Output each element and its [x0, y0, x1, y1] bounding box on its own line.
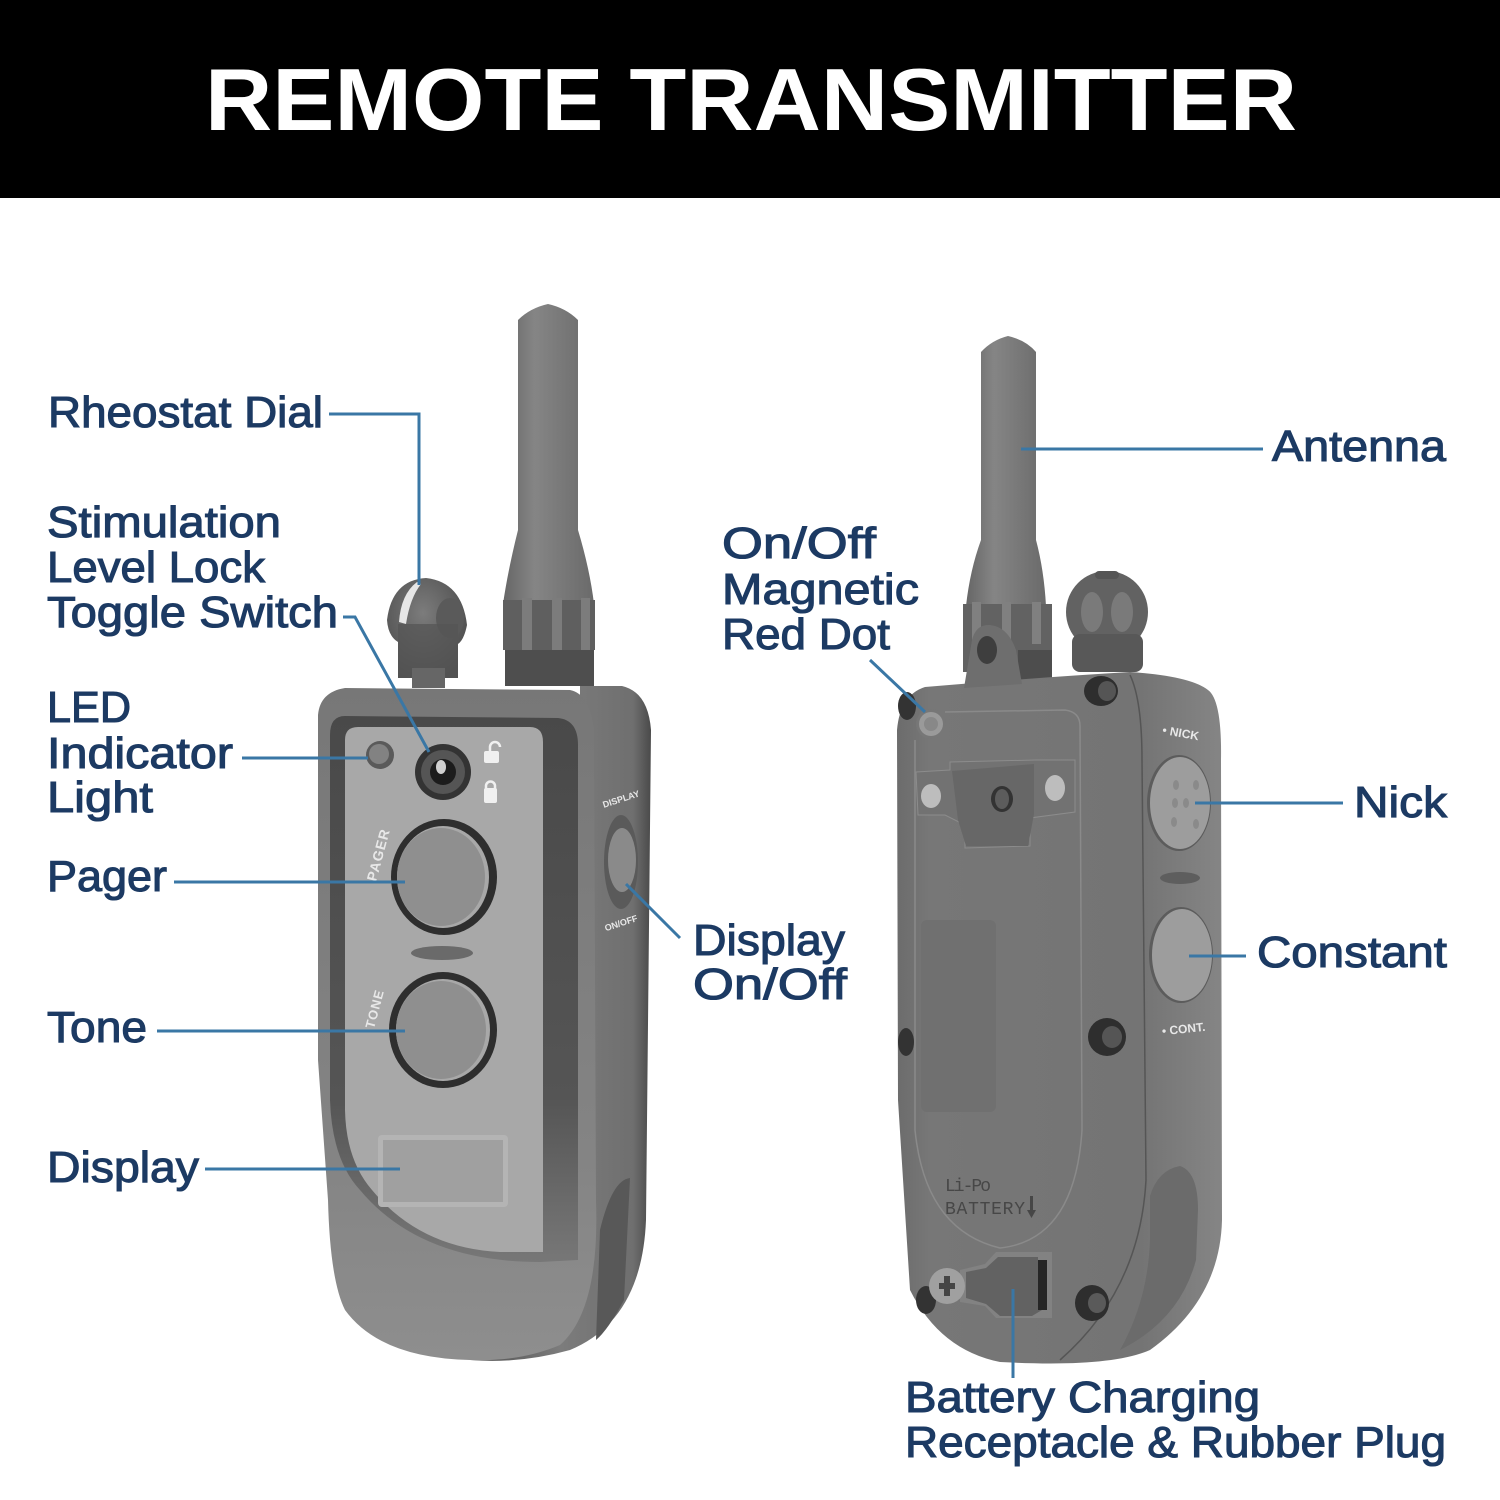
label: Battery Charging Receptacle & Rubber Plug	[905, 1373, 1446, 1467]
label: Battery Charging Receptacle & Rubber Plug: Battery Charging	[905, 1373, 1260, 1422]
back grip	[1120, 1166, 1198, 1350]
label: LED Indicator Light: Indicator	[47, 729, 233, 778]
label: Display: Display	[47, 1143, 199, 1192]
header band	[0, 0, 1500, 198]
lanyard lug	[964, 625, 1022, 688]
battery cover outline	[915, 710, 1082, 1248]
toggle switch	[415, 744, 471, 800]
front antenna	[503, 304, 595, 686]
nick button	[1147, 723, 1211, 851]
title: REMOTE TRANSMITTER	[205, 50, 1297, 149]
label: Display On/Off: Display	[693, 916, 845, 965]
label: Nick: Nick	[1354, 778, 1448, 827]
label: LED Indicator Light: LED	[47, 683, 131, 732]
tone button	[362, 972, 497, 1088]
label: Stimulation Level Lock Toggle Switch: Stimulation	[47, 498, 281, 547]
label: Stimulation Level Lock Toggle Switch	[47, 498, 338, 637]
label: On/Off Magnetic Red Dot: Magnetic	[722, 565, 919, 614]
clip recess	[916, 760, 1075, 848]
back dial	[1066, 571, 1148, 672]
label: Pager: Pager	[47, 852, 167, 901]
side display button: DISPLAY	[601, 788, 641, 810]
label: Display On/Off: On/Off	[693, 960, 848, 1009]
label: Tone: Tone	[47, 1003, 147, 1052]
battery text: Li-Po	[945, 1177, 991, 1197]
small divider	[1160, 872, 1200, 884]
constant button	[1149, 907, 1213, 1038]
front view of transmitter	[318, 304, 651, 1361]
label: Stimulation Level Lock Toggle Switch: Level Lock	[47, 543, 266, 592]
battery text	[945, 1177, 1036, 1220]
label: Antenna: Antenna	[1272, 422, 1447, 471]
label: Constant: Constant	[1257, 928, 1447, 977]
lock icons	[484, 742, 500, 803]
pager button	[363, 819, 497, 935]
body seam	[1060, 675, 1146, 1360]
side display button: ON/OFF	[603, 913, 639, 933]
front body	[318, 686, 651, 1361]
tone button: TONE	[362, 988, 387, 1030]
label: Battery Charging Receptacle & Rubber Plug: Receptacle & Rubber Plug	[905, 1418, 1446, 1467]
back antenna	[963, 336, 1052, 680]
label: LED Indicator Light	[47, 683, 233, 822]
screws	[898, 676, 1126, 1321]
battery text: BATTERY	[945, 1200, 1025, 1220]
label: On/Off Magnetic Red Dot: On/Off	[722, 519, 877, 568]
side display button	[601, 788, 641, 933]
constant button: • CONT.	[1161, 1020, 1206, 1038]
label: LED Indicator Light: Light	[47, 773, 153, 822]
callout lines	[157, 414, 1343, 1378]
grip texture	[596, 1178, 630, 1340]
label: Rheostat Dial: Rheostat Dial	[48, 388, 323, 437]
rheostat dial	[387, 578, 467, 688]
nick button: • NICK	[1161, 723, 1200, 743]
label: On/Off Magnetic Red Dot: Red Dot	[722, 610, 890, 659]
display window	[378, 1135, 508, 1207]
label: Stimulation Level Lock Toggle Switch: Toggle Switch	[47, 588, 338, 637]
LED indicator	[366, 741, 394, 769]
back view of transmitter	[897, 336, 1222, 1364]
front face panel	[345, 727, 543, 1252]
magnetic red dot	[916, 709, 946, 739]
charging plug	[929, 1252, 1052, 1318]
label: Display On/Off	[693, 916, 848, 1009]
label recess	[921, 920, 996, 1112]
label: On/Off Magnetic Red Dot	[722, 519, 919, 659]
divider pill	[411, 946, 473, 960]
pager button: PAGER	[363, 827, 393, 883]
back body	[897, 625, 1222, 1364]
